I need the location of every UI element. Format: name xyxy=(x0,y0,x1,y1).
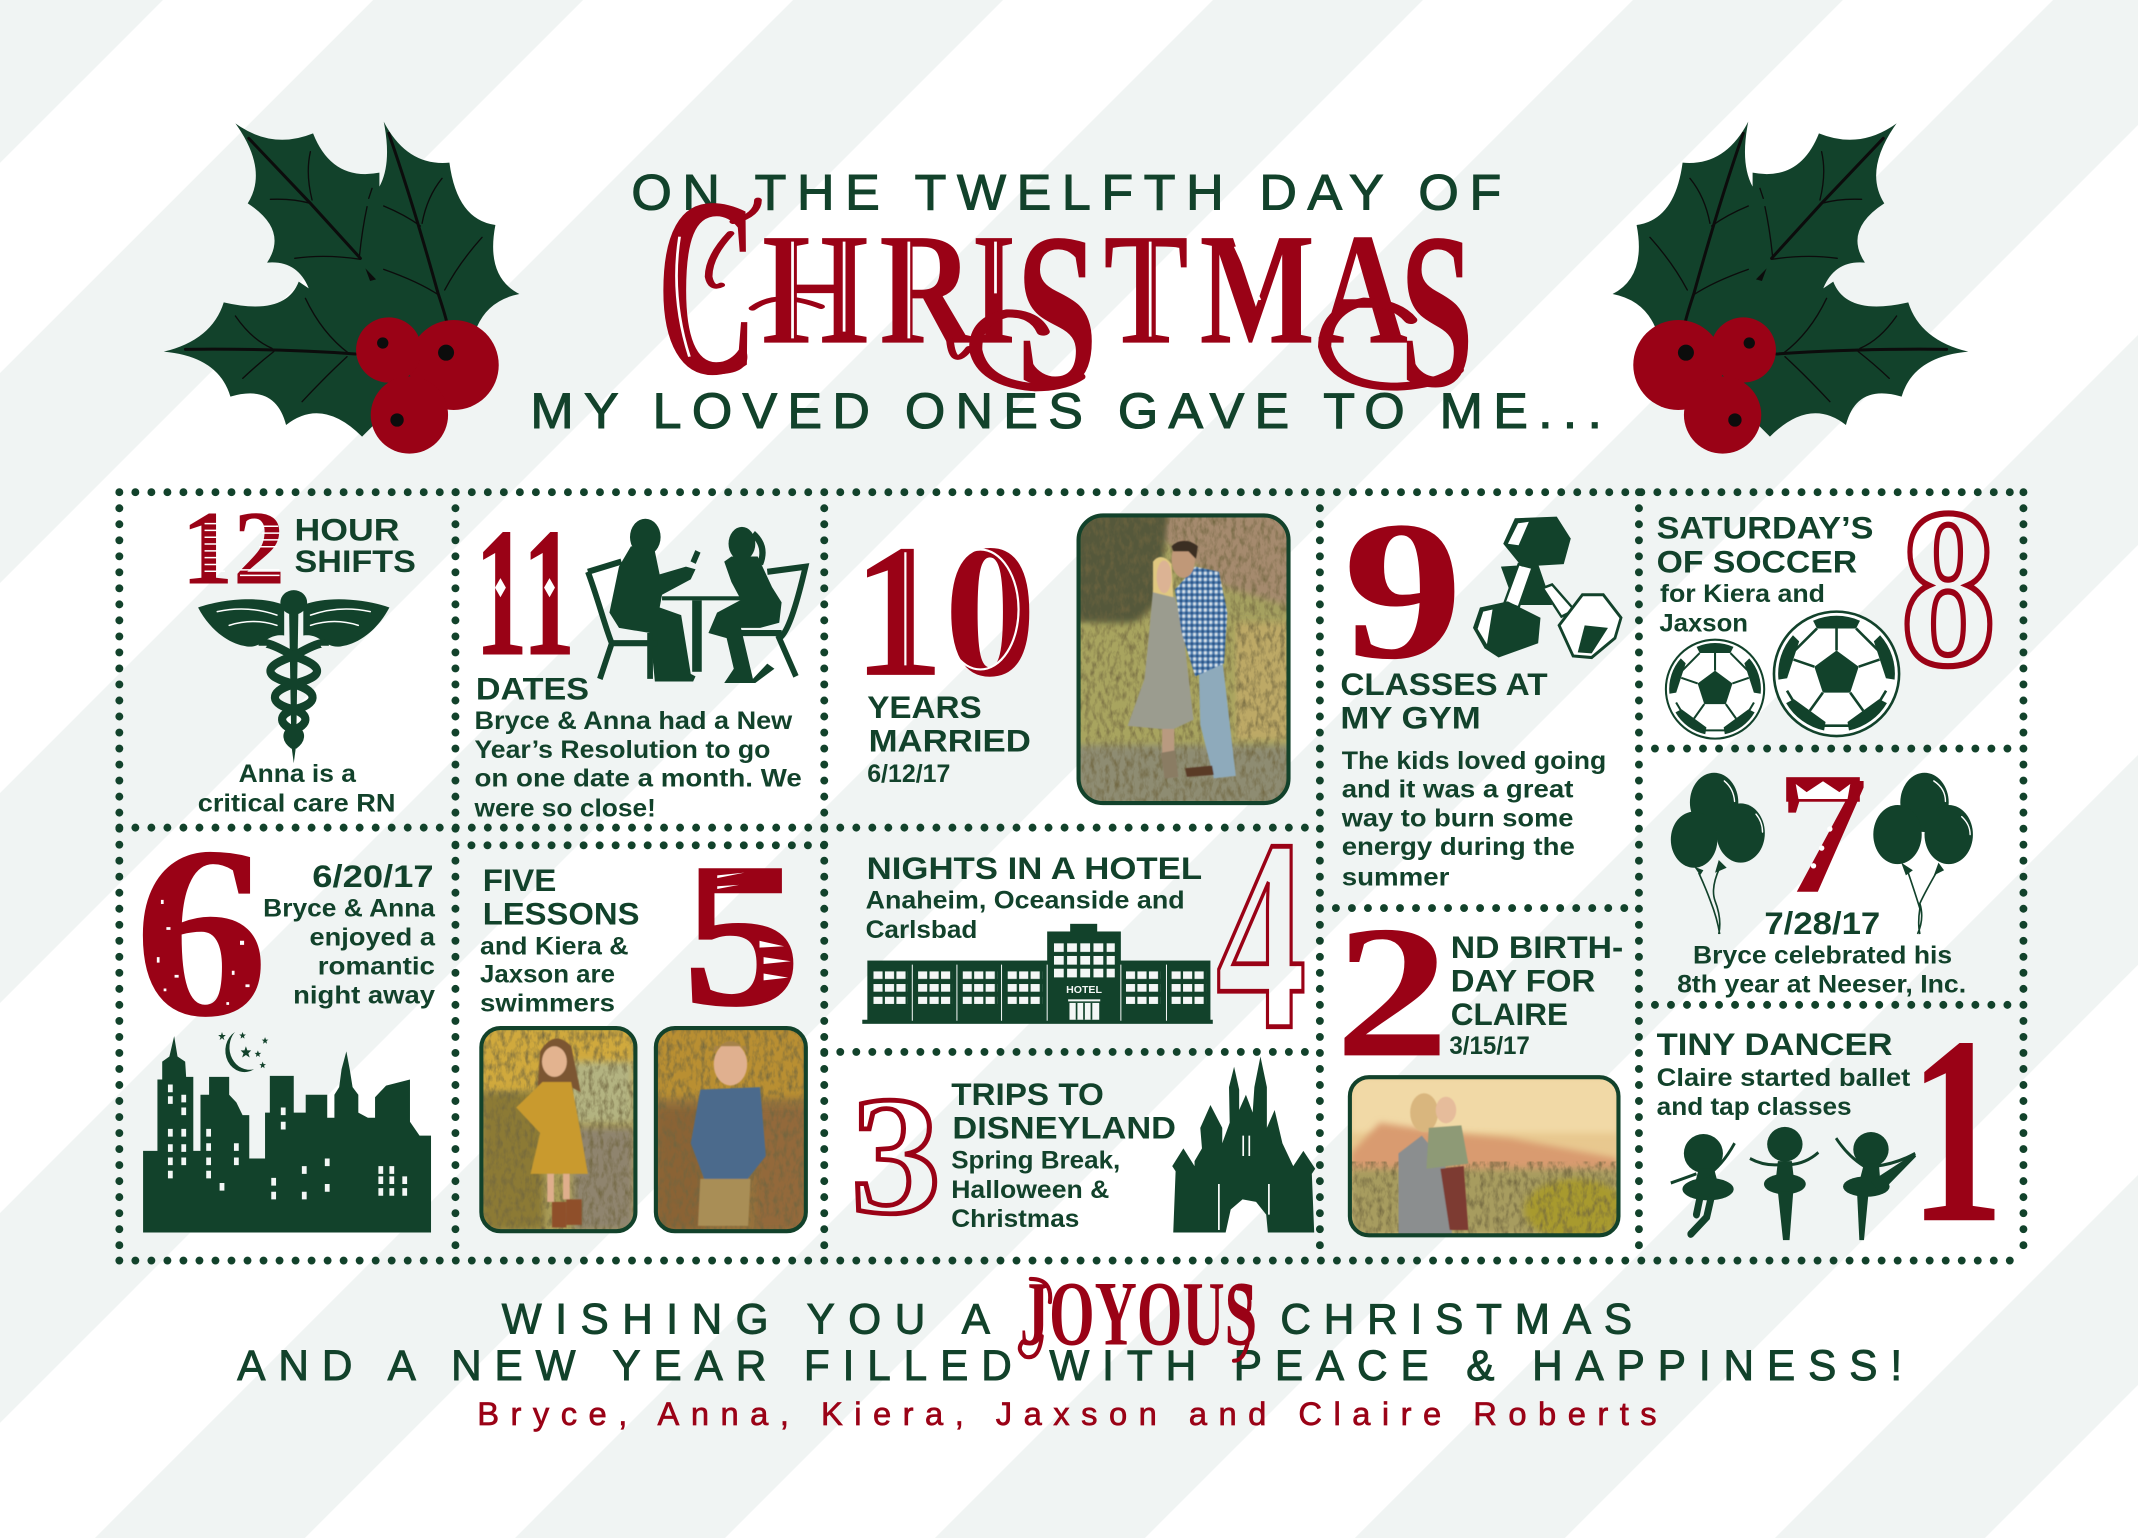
word: Joyous xyxy=(1020,1262,1257,1365)
panel: 11 dates xyxy=(473,490,806,823)
icon: dumbbells xyxy=(1473,517,1621,657)
body text: swimmers xyxy=(480,990,615,1018)
caption: Anna is a xyxy=(239,760,357,788)
number 11 xyxy=(475,490,575,695)
panel: 9 classes at my gym xyxy=(1340,481,1621,892)
icon: castle xyxy=(1172,1056,1315,1233)
heading: YEARS xyxy=(867,690,982,725)
heading: ND BIRTH- xyxy=(1451,930,1623,965)
caption xyxy=(198,760,395,817)
panel: 7 xyxy=(1671,741,1973,999)
number 8: 8 xyxy=(1901,462,1996,713)
date: 3/15/17 xyxy=(1449,1032,1530,1060)
photo: couple xyxy=(1077,511,1293,806)
heading xyxy=(867,690,1031,758)
heading: SATURDAY’S xyxy=(1657,511,1873,546)
heading xyxy=(295,513,416,579)
heading: MY GYM xyxy=(1340,701,1481,736)
title: Christmas: T xyxy=(1104,201,1189,378)
heading: DISNEYLAND xyxy=(952,1111,1176,1146)
body text: and Kiera & xyxy=(480,932,629,960)
panel: 1 tiny dancer xyxy=(1657,982,2004,1279)
icon: soccer balls xyxy=(1666,612,1899,739)
title: Christmas: A xyxy=(1317,201,1408,378)
icon: right holly xyxy=(1613,122,1968,454)
body text: enjoyed a xyxy=(310,923,436,951)
heading: CLAIRE xyxy=(1451,997,1568,1032)
heading: MARRIED xyxy=(869,723,1031,758)
title: Christmas: R xyxy=(879,201,975,378)
panel: 10 years married xyxy=(852,506,1293,806)
title: Christmas: H xyxy=(762,201,869,378)
body text xyxy=(1657,1064,1911,1121)
heading: TRIPS TO xyxy=(951,1077,1104,1112)
date: 6/20/17 xyxy=(312,859,434,894)
number 2: 2 xyxy=(1335,886,1449,1096)
heading: DATES xyxy=(476,671,589,706)
panel: 2nd birthday xyxy=(1344,930,1622,1238)
heading xyxy=(951,1077,1176,1146)
heading: HOUR xyxy=(295,513,400,548)
body text: Bryce & Anna had a New xyxy=(475,707,793,735)
panel: 12 hour shifts xyxy=(181,490,416,817)
heading: FIVE xyxy=(483,863,556,898)
date: 6/12/17 xyxy=(867,760,950,788)
panel: 6 xyxy=(134,796,436,1233)
icon: hotel xyxy=(862,924,1213,1024)
title: Christmas: S xyxy=(1016,188,1098,434)
number 4: 4 xyxy=(1216,784,1306,1087)
body text xyxy=(866,887,1185,944)
body text: romantic xyxy=(318,952,435,980)
number 6: 6 xyxy=(134,796,269,1068)
family names: Bryce, Anna, Kiera, Jaxson and Claire Roberts xyxy=(477,1395,1657,1432)
body text: energy during the xyxy=(1342,833,1575,861)
body text: Halloween & xyxy=(951,1176,1109,1204)
dotted grid xyxy=(119,492,2023,1261)
icon: ballerinas xyxy=(1671,1127,1916,1240)
photo: mother and Claire xyxy=(1350,1077,1627,1240)
panel: 5 five lessons xyxy=(480,823,806,1231)
body text: Jaxson are xyxy=(480,961,615,989)
body text: and tap classes xyxy=(1657,1093,1852,1121)
number 12: 12 xyxy=(181,490,285,608)
number 5: 5 xyxy=(683,823,800,1049)
body text xyxy=(473,707,802,823)
footer line two: AND A NEW YEAR FILLED WITH PEACE & HAPPINESS! xyxy=(237,1342,1902,1389)
body text: Carlsbad xyxy=(866,916,977,944)
panel: 8 saturdays of soccer xyxy=(1657,462,1996,739)
body text xyxy=(1659,580,1825,637)
heading: NIGHTS IN A HOTEL xyxy=(867,851,1202,886)
body text: 8th year at Neeser, Inc. xyxy=(1677,971,1966,999)
body text xyxy=(263,894,436,1010)
body text: Year’s Resolution to go xyxy=(475,736,770,764)
panel: 3 trips to disneyland xyxy=(851,1056,1315,1249)
body text: Claire started ballet xyxy=(1657,1064,1911,1092)
number 7: 7 xyxy=(1778,741,1868,929)
body text: The kids loved going xyxy=(1342,747,1606,775)
body text: Bryce celebrated his xyxy=(1693,942,1952,970)
heading: CLASSES AT xyxy=(1340,667,1548,702)
date: 7/28/17 xyxy=(1764,906,1880,941)
title line one: ON THE TWELFTH DAY OF xyxy=(631,164,1501,220)
title: Christmas xyxy=(657,145,1474,434)
number 1: 1 xyxy=(1909,982,2004,1279)
body text: for Kiera and xyxy=(1660,580,1825,608)
number 3: 3 xyxy=(851,1061,941,1249)
body text: Anaheim, Oceanside and xyxy=(866,887,1185,915)
body text: Jaxson xyxy=(1659,609,1748,637)
photo: boy xyxy=(656,1027,806,1231)
icon: couple at table xyxy=(588,519,806,683)
heading: SHIFTS xyxy=(295,544,416,579)
body text xyxy=(480,932,629,1018)
number 9: 9 xyxy=(1343,481,1463,701)
body text: and it was a great xyxy=(1342,775,1574,803)
title: Christmas: M xyxy=(1200,201,1315,378)
heading: LESSONS xyxy=(483,896,640,931)
body text xyxy=(1341,747,1606,892)
body text: Bryce & Anna xyxy=(263,894,436,922)
body text: summer xyxy=(1342,864,1450,892)
heading xyxy=(1340,667,1548,736)
word: Joyous: JOYOUS xyxy=(1020,1262,1257,1365)
title line three: MY LOVED ONES GAVE TO ME... xyxy=(530,383,1602,439)
icon: left holly xyxy=(164,122,519,454)
icon: hotel: HOTEL xyxy=(1066,984,1103,996)
icon: caduceus xyxy=(198,590,389,763)
body text: on one date a month. We xyxy=(475,765,802,793)
icon: balloons left and right xyxy=(1671,773,1973,934)
heading xyxy=(1657,511,1873,579)
body text: way to burn some xyxy=(1341,804,1573,832)
body text: Christmas xyxy=(951,1205,1079,1233)
number 10: 10 xyxy=(852,506,1036,717)
body text: night away xyxy=(293,982,435,1010)
caption: critical care RN xyxy=(198,789,395,817)
number 11: 11 xyxy=(475,490,575,695)
heading xyxy=(1451,930,1623,1032)
body text: Spring Break, xyxy=(951,1146,1120,1174)
text: S xyxy=(1400,188,1474,434)
photo: girl xyxy=(481,1027,635,1231)
body text: were so close! xyxy=(473,795,656,823)
title: Christmas: I xyxy=(972,201,1016,378)
heading: TINY DANCER xyxy=(1657,1027,1893,1062)
icon: city skyline xyxy=(143,1036,431,1233)
body text xyxy=(951,1146,1120,1233)
panel: 4 nights in a hotel xyxy=(862,784,1306,1087)
heading: DAY FOR xyxy=(1451,964,1595,999)
body text xyxy=(1677,942,1966,999)
footer line one continued: CHRISTMAS xyxy=(1280,1295,1632,1342)
title: Christmas: C xyxy=(657,145,758,428)
heading: OF SOCCER xyxy=(1657,544,1857,579)
icon: moon and stars xyxy=(218,1032,268,1072)
heading xyxy=(483,863,640,931)
footer line one: WISHING YOU A xyxy=(502,1295,991,1342)
